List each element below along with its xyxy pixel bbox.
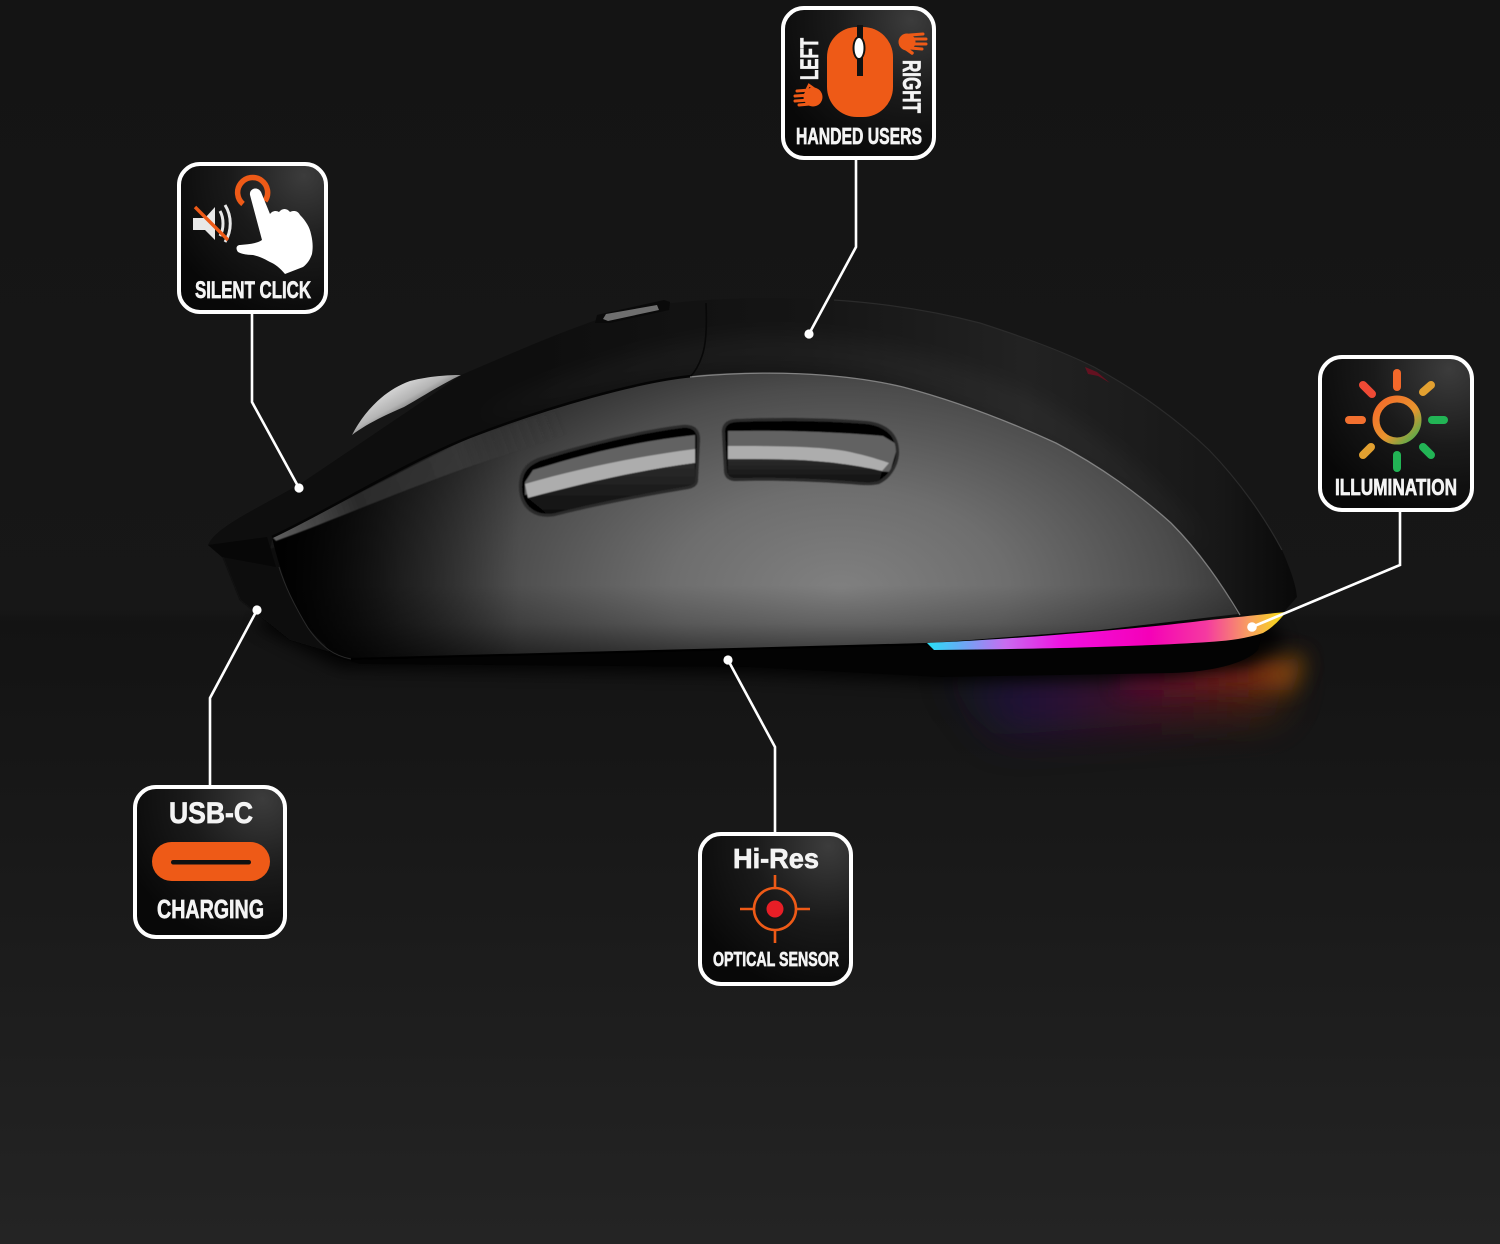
mouse underside [330, 630, 1263, 677]
callout line: optical sensor [723, 655, 775, 834]
label: CHARGING: CHARGING [157, 894, 264, 924]
rim highlight [834, 300, 1282, 550]
badge frame [783, 8, 934, 158]
DPI button [595, 300, 670, 323]
scroll wheel [352, 375, 461, 435]
badge frame [700, 834, 851, 984]
badge: USB-C charging [135, 787, 285, 937]
label: HANDED USERS: HANDED USERS [796, 123, 922, 149]
icon: RGB sun [1349, 373, 1444, 468]
label: OPTICAL SENSOR: OPTICAL SENSOR [713, 949, 839, 971]
shell sheen [470, 335, 1210, 550]
icon: left hand [795, 85, 822, 106]
badge: illumination [1320, 357, 1472, 510]
icon: orange mouse [827, 25, 893, 117]
panel edge line [690, 373, 1240, 615]
panel bottom line [351, 644, 930, 659]
top button seam [690, 303, 706, 377]
panel rear line [279, 567, 351, 659]
badge: left and right handed users [783, 8, 934, 158]
badge frame [1320, 357, 1472, 510]
label: RIGHT: RIGHT [897, 60, 925, 113]
icon: click ring [238, 178, 268, 204]
nose lip [208, 537, 276, 567]
label: LEFT: LEFT [796, 38, 824, 80]
badge: silent click [179, 164, 326, 312]
label: SILENT CLICK: SILENT CLICK [195, 277, 311, 304]
badge frame [179, 164, 326, 312]
icon: muted speaker [193, 205, 230, 242]
callout line: silent click [252, 312, 304, 493]
panel top dark line [272, 376, 692, 537]
label: Hi-Res: Hi-Res [733, 843, 819, 874]
mouse [208, 298, 1297, 682]
callout line: handed users [804, 158, 856, 339]
logo mark [1085, 367, 1110, 383]
icon: USB-C port [152, 842, 270, 881]
mouse contact shadow [255, 600, 1285, 682]
label: USB-C: USB-C [169, 797, 253, 830]
rear base shadow [222, 548, 330, 652]
icon: sensor target [740, 875, 810, 943]
panel shading [272, 435, 1237, 660]
side panel [272, 373, 1238, 660]
callout line: USB-C [210, 605, 262, 787]
right grip window [722, 418, 900, 486]
badge: hi-res optical sensor [700, 834, 851, 984]
icon: pointing hand [237, 188, 313, 274]
badge frame [135, 787, 285, 937]
label: ILLUMINATION: ILLUMINATION [1335, 474, 1457, 500]
RGB light strip [927, 612, 1286, 650]
icon: right hand [898, 34, 926, 53]
left grip window [518, 424, 700, 517]
callout line: illumination [1247, 510, 1400, 632]
mouse shell [208, 298, 1297, 614]
light reflection on desk [950, 655, 1305, 735]
